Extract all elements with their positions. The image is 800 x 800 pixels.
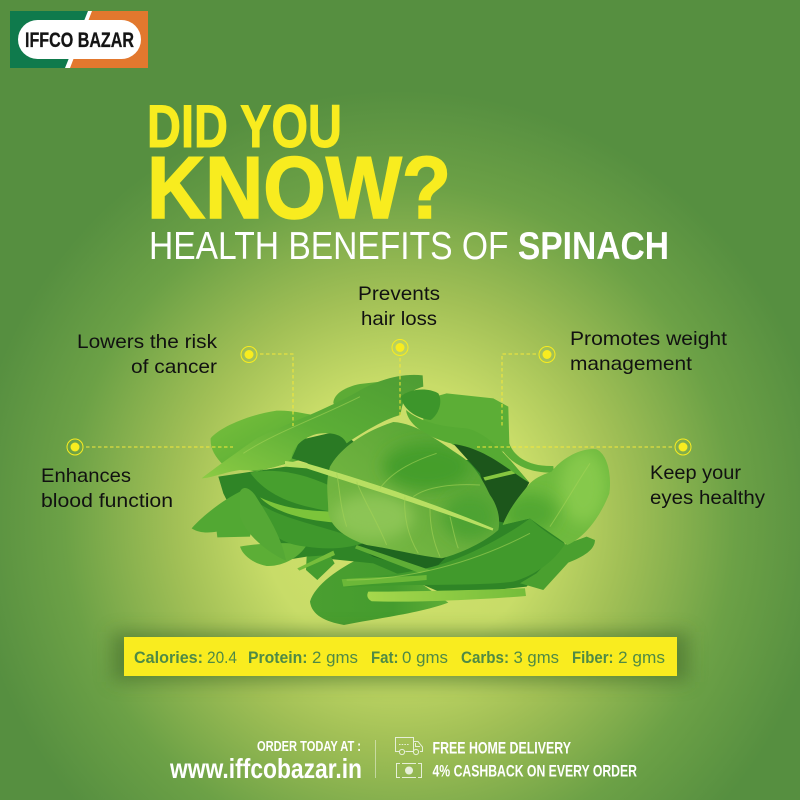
footer: order today: ORDER TODAY AT : [257, 739, 361, 755]
stem: thin upper [342, 575, 427, 587]
benefit: enhances blood function [41, 439, 173, 512]
nutrition bar: Protein: [248, 649, 308, 667]
footer: order today [169, 739, 362, 784]
nutrition bar: Calories: [134, 649, 203, 667]
upper right back leaf [423, 393, 554, 473]
long upper leaf [202, 375, 423, 478]
benefit: prevents hair loss: Prevents [358, 283, 440, 305]
benefit: keep your eyes healthy: eyes healthy [650, 487, 765, 509]
base shadow layer [218, 460, 565, 595]
stem: middle [355, 545, 430, 573]
benefit: prevents hair loss: hair loss [361, 308, 437, 330]
benefit: promotes weight management [539, 328, 728, 375]
right leaf [500, 447, 613, 547]
nutrition bar shadow [112, 632, 689, 682]
nutrition bar: 20.4 [207, 649, 237, 667]
footer: delivery text: FREE HOME DELIVERY [432, 740, 571, 758]
footer: cashback text: 4% CASHBACK ON EVERY ORDER [432, 762, 637, 780]
nutrition bar: 0 gms [402, 649, 448, 667]
upper right folded leaf [406, 410, 529, 483]
nutrition bar: 2 gms [618, 649, 665, 667]
nutrition bar: Fat: [371, 649, 398, 667]
footer divider [375, 740, 376, 778]
nutrition bar: Carbs: [461, 649, 509, 667]
icon: cash note [396, 764, 422, 778]
benefit: lowers the risk of cancer: of cancer [131, 356, 218, 378]
back top leaf [333, 380, 402, 412]
stem: upper right [483, 470, 516, 481]
lower right leaf [342, 518, 565, 587]
small leaf near stems [306, 555, 335, 580]
benefit: lowers the risk of cancer [77, 331, 257, 378]
bottom leaf [310, 557, 448, 625]
dark hole upper [292, 431, 360, 470]
subtitle: HEALTH BENEFITS OF SPINACH [149, 225, 669, 268]
benefit: promotes weight management: management [570, 353, 693, 375]
nutrition bar: Fiber: [572, 649, 614, 667]
benefit: enhances blood function: blood function [41, 490, 173, 512]
icon: delivery truck [396, 738, 422, 755]
central big leaf [323, 420, 503, 560]
stem: lower [367, 588, 526, 602]
title line: know: KNOW? [147, 138, 451, 237]
dark interior below [347, 540, 447, 573]
upper curled leaf [401, 390, 440, 420]
benefit: lowers the risk of cancer: Lowers the risk [77, 331, 217, 353]
benefit: prevents hair loss [358, 283, 440, 356]
nutrition bar: 3 gms [514, 649, 559, 667]
far right tip [520, 537, 595, 590]
logo: IFFCO Bazar: IFFCO BAZAR [25, 29, 134, 52]
logo: IFFCO Bazar [10, 11, 148, 68]
spine leaf [240, 488, 286, 561]
footer: order today: www.iffcobazar.in [169, 753, 362, 784]
mid left leaf [250, 471, 332, 512]
far left leaves [192, 492, 253, 537]
dark interior right [450, 440, 529, 523]
left underside leaf [257, 502, 363, 548]
nutrition bar: 2 gms [312, 649, 358, 667]
thin lime leaf [260, 497, 333, 522]
benefit: keep your eyes healthy [650, 439, 765, 509]
back left leaf [211, 411, 313, 472]
nutrition bar [124, 637, 677, 676]
left curled leaf [240, 543, 307, 566]
central leaf stem and midrib [285, 461, 493, 531]
connector lines [86, 354, 672, 447]
benefit: keep your eyes healthy: Keep your [650, 462, 742, 484]
leaf veins [243, 397, 590, 580]
benefit: promotes weight management: Promotes weight [570, 328, 728, 350]
benefit: enhances blood function: Enhances [41, 465, 131, 487]
title line: did you: DID YOU [147, 93, 342, 160]
title [147, 93, 451, 237]
spinach illustration [192, 375, 613, 625]
